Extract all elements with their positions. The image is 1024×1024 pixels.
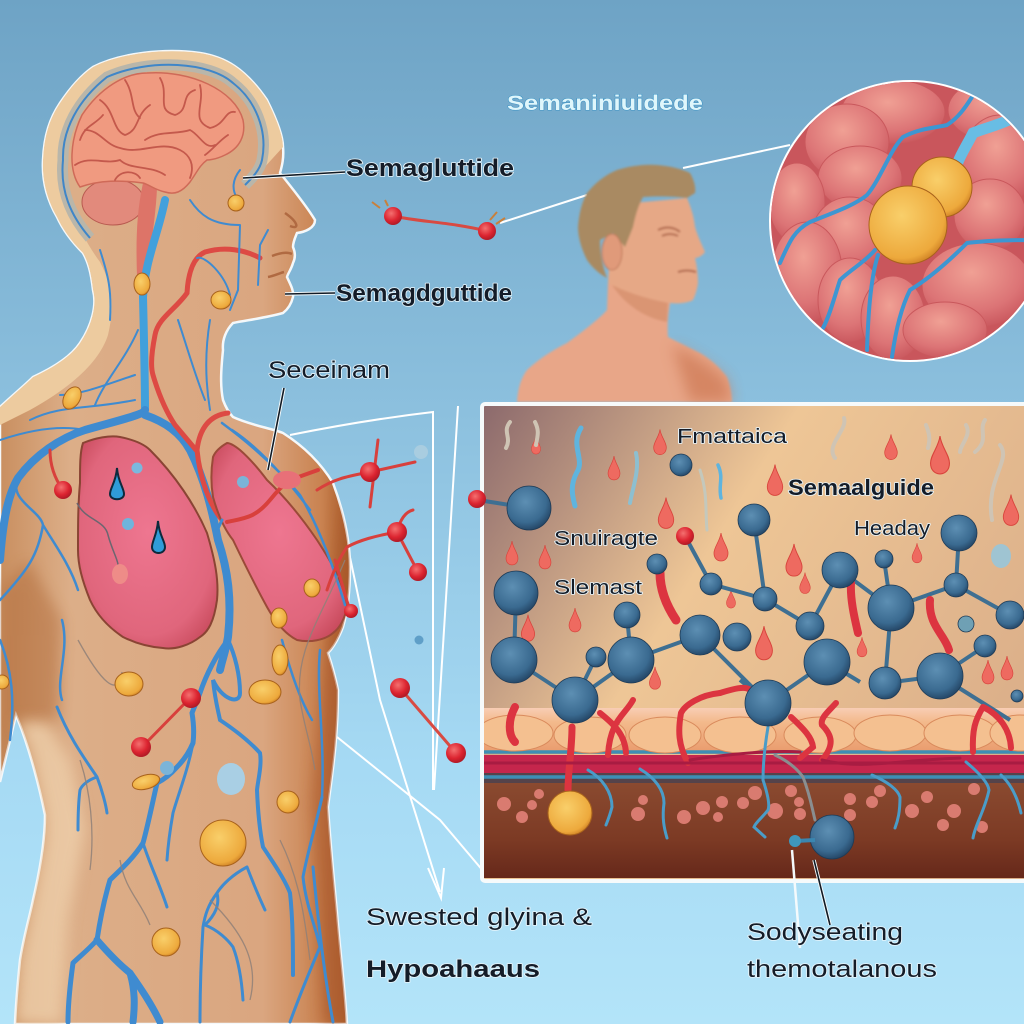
- torso veins: [0, 375, 345, 1022]
- man bust: [517, 165, 732, 402]
- cerebellum: [82, 179, 144, 225]
- red molecule nodes on body: [50, 440, 428, 757]
- tissue base: [770, 80, 1024, 365]
- anatomical body figure: [0, 51, 360, 1024]
- blue molecule atoms: [491, 454, 1024, 859]
- arrow head bottom: [428, 868, 444, 898]
- labels: [268, 92, 937, 983]
- tissue lobes: [769, 80, 1024, 360]
- right lung: [212, 443, 347, 641]
- gold cell: [548, 791, 592, 835]
- label semaalguide: Semaalguide: [788, 475, 934, 500]
- reaction panel: [468, 404, 1024, 881]
- red atom: [676, 527, 694, 545]
- label semaglutide top: Semagluttide: [346, 155, 514, 182]
- face: [608, 198, 705, 303]
- lungs: [77, 436, 347, 648]
- left lung: [78, 436, 218, 648]
- floating dumbbell molecule: [372, 200, 505, 240]
- free molecule below arm: [390, 678, 466, 763]
- grey squiggles: [506, 418, 1003, 520]
- facial features: [658, 228, 696, 272]
- label fmattaica: Fmattaica: [677, 426, 788, 448]
- label sodyseating: Sodyseating: [747, 919, 903, 946]
- cerebrum: [72, 73, 244, 193]
- nodules: [497, 783, 988, 833]
- body shading: [0, 51, 360, 1024]
- connector lines to inset panel: [290, 406, 484, 892]
- molecule bonds: [478, 500, 1010, 720]
- white leader lines to man: [500, 145, 790, 223]
- body silhouette: [0, 51, 350, 1024]
- fat cells: [912, 157, 972, 217]
- vessels: [780, 97, 1024, 357]
- tissue layers: [477, 708, 1024, 878]
- brain stem: [137, 183, 157, 277]
- lung droplets: [110, 468, 165, 553]
- brain folds: [75, 78, 235, 180]
- zoom circle callout: [769, 80, 1024, 365]
- fine nerve lines: [78, 560, 345, 1000]
- label slemast: Slemast: [554, 577, 643, 599]
- title label: Semaniniuidede: [507, 92, 703, 115]
- nose and lips: [268, 213, 296, 277]
- ear: [602, 234, 622, 270]
- head vessel ring: [62, 65, 263, 238]
- fat deposits: [0, 195, 320, 956]
- red strands: [484, 573, 1024, 790]
- brain: [72, 73, 244, 277]
- small blue atom: [789, 835, 815, 847]
- label seceinam: Seceinam: [268, 357, 390, 384]
- shoulders and neck: [517, 283, 732, 402]
- label swested glyina: Swested glyina &: [366, 904, 592, 931]
- label headay: Headay: [854, 518, 930, 540]
- hair: [578, 165, 695, 278]
- label hypoahaaus: Hypoahaaus: [366, 956, 540, 983]
- label themotalanous: themotalanous: [747, 956, 937, 983]
- label snuiragte: Snuiragte: [554, 528, 658, 550]
- label semaglutide middle: Semagdguttide: [336, 280, 512, 307]
- neck vessels: [0, 170, 268, 670]
- drops: [506, 429, 1019, 689]
- blue roots: [588, 727, 1021, 838]
- pointer lines: [243, 172, 830, 948]
- blue squiggles: [572, 428, 721, 530]
